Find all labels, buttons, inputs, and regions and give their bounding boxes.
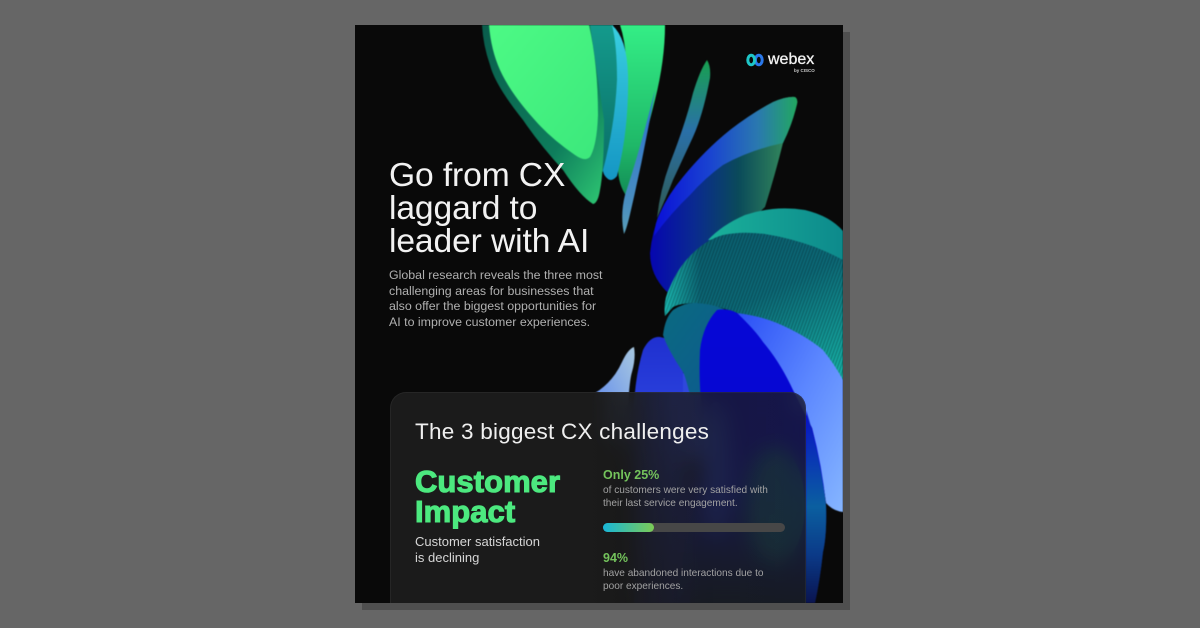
stat: 94%: 94% [603,551,628,565]
card heading: The 3 biggest CX challenges [415,419,709,444]
stat description [603,568,764,592]
leaf: deep blue [690,309,826,603]
panel: document page [355,25,843,603]
glow: teal behind card [745,447,805,563]
leaf: large green [482,25,604,204]
leaf: teal band [585,25,621,172]
leaf: hatched teal [665,233,843,392]
progress bar: 25% [603,523,785,532]
leaf: pale blue spike [590,347,635,440]
stat description [603,485,768,509]
challenge summary: is declining [415,550,479,565]
logo: webex by cisco [746,51,815,73]
title: laggard to [389,190,537,227]
title: Go from CX [389,157,565,194]
abstract leaf artwork [482,25,843,603]
intro paragraph: AI to improve customer experiences. [389,315,590,329]
stat: only 25%: Only 25% [603,468,659,482]
intro paragraph: Global research reveals the three most [389,268,602,282]
challenge name [415,464,560,529]
title [389,157,589,260]
leaf: blue sliver [622,90,655,234]
logo wordmark: webex [768,51,814,68]
stat description: of customers were very satisfied with [603,485,768,496]
intro paragraph: also offer the biggest opportunities for [389,299,596,313]
progress fill [603,523,654,532]
icon: webex loops [746,54,764,66]
challenge name: Impact [415,494,515,529]
challenge name: Customer [415,464,560,499]
stat description: poor experiences. [603,581,683,592]
stat description: their last service engagement. [603,498,738,509]
page drop shadow [362,32,850,610]
leaf: dark teal [663,303,730,395]
glow: dim blue behind card left [590,405,628,470]
leaf: pale blue sweep [737,313,843,512]
leaf: far sliver [657,60,710,218]
title: leader with AI [389,223,589,260]
stat description: have abandoned interactions due to [603,568,764,579]
intro paragraph: challenging areas for businesses that [389,284,594,298]
leaf: cyan band [603,25,628,180]
logo byline: by CISCO [794,68,815,73]
intro paragraph [389,268,602,329]
panel: the 3 biggest CX challenges [390,392,806,628]
challenge summary [415,534,540,565]
leaf: teal top [708,208,843,262]
leaf: big blue [650,97,797,292]
challenge summary: Customer satisfaction [415,534,540,549]
leaf: green right [618,25,665,197]
glow: bright blue behind card [702,402,730,538]
leaf: small blue [632,337,722,603]
